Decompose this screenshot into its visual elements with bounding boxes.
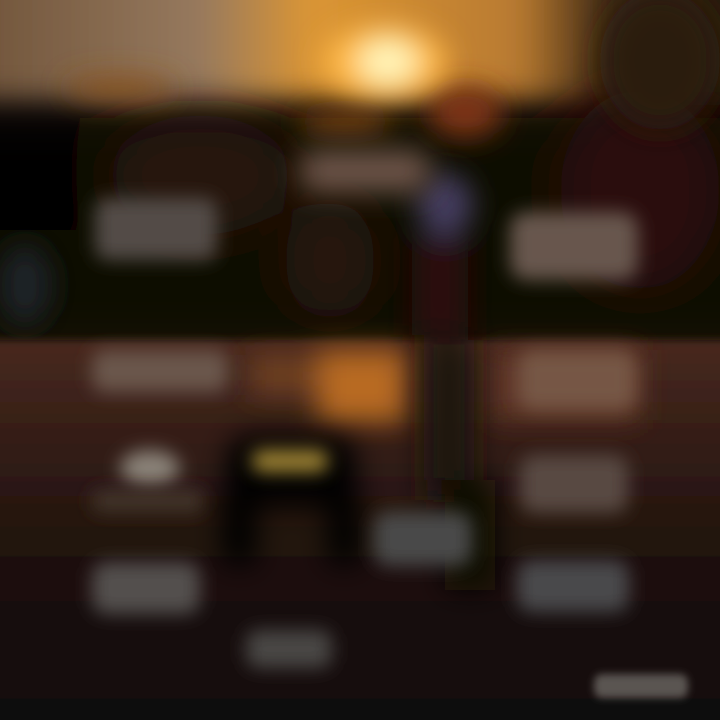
central badge highlight bbox=[252, 450, 328, 472]
background photo: dark tree line bbox=[0, 90, 720, 340]
text block: bottom right bbox=[517, 560, 629, 612]
footer logo bbox=[594, 674, 688, 698]
text block: lower left small bbox=[120, 450, 180, 486]
text block: bottom centre bbox=[246, 630, 332, 668]
background photo: sun glow bbox=[323, 26, 447, 98]
text block: middle right bbox=[518, 350, 636, 410]
text block: upper right bbox=[510, 212, 638, 280]
text block: lower right bbox=[520, 455, 628, 513]
text block: lower left caption bbox=[92, 490, 204, 512]
text block: bottom left bbox=[92, 562, 200, 614]
text block: upper left bbox=[95, 198, 217, 260]
background photo: tree highlights bbox=[0, 0, 720, 327]
background photo: water bbox=[0, 340, 720, 720]
central badge bbox=[222, 435, 360, 565]
background photo: sun reflection bbox=[250, 350, 640, 422]
background photo: person silhouette bbox=[412, 173, 495, 590]
background photo: sunset sky bbox=[0, 0, 720, 105]
text block: top centre bbox=[300, 150, 430, 192]
text block: lower centre bbox=[374, 512, 472, 566]
text block: middle left bbox=[92, 350, 228, 392]
